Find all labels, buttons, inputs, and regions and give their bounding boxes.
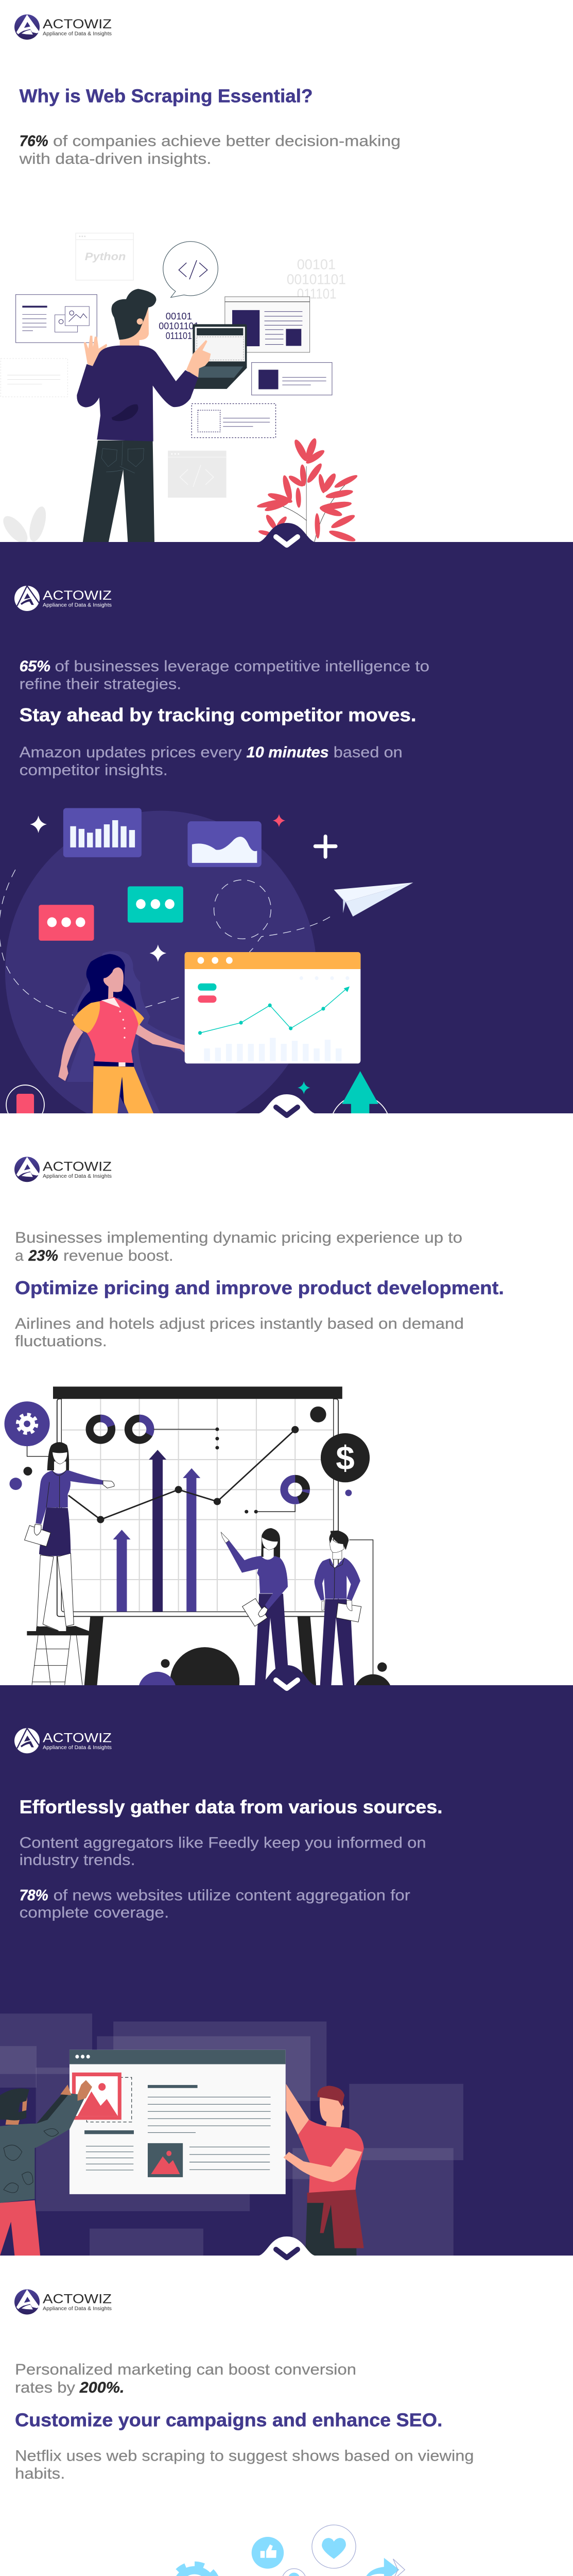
statistic text: 23% (28, 1247, 58, 1264)
illustration: people placing image on page (0, 2013, 463, 2256)
illustration: person with web cards (0, 233, 359, 547)
grey binary digits: 00101101 (287, 271, 346, 287)
icon: share arrow (364, 2558, 405, 2576)
supporting text: Content aggregators like Feedly keep you informed on (20, 1834, 426, 1851)
connector: section 3 (256, 1665, 318, 1688)
board legs (84, 1615, 316, 1687)
plant (256, 437, 359, 544)
woman pointing on ladder (25, 1442, 114, 1685)
supporting text (15, 2448, 474, 2482)
statistic text: 65% (20, 658, 50, 675)
grey binary digits: 00101 (297, 256, 336, 273)
bar chart card (63, 808, 142, 857)
logo: Appliance of Data & Insights (43, 31, 112, 37)
logo (14, 586, 112, 611)
connector: section 2 (256, 1094, 318, 1115)
man in red shirt (283, 2084, 364, 2256)
dollar coin (321, 1433, 370, 1482)
paper plane (334, 883, 413, 917)
statistic text: refine their strategies. (20, 676, 181, 692)
supporting text: 10 minutes (247, 744, 329, 761)
illustration: analytics dashboard (0, 808, 413, 1158)
logo: Appliance of Data & Insights (43, 1174, 112, 1179)
statistic text: a (15, 1247, 24, 1264)
illustration: SEO icons (138, 2525, 450, 2576)
dashed card (192, 404, 276, 438)
logo (14, 1157, 112, 1182)
panel: personalized marketing (0, 2256, 573, 2576)
panel: content aggregation (0, 1685, 573, 2256)
statistic text (15, 1229, 462, 1264)
badge bottom left (6, 1085, 44, 1124)
sparkles (30, 814, 336, 1094)
statistic text: of businesses leverage competitive intelligence to (55, 658, 429, 675)
grey binary digits (287, 256, 346, 301)
icon: thumbs up (252, 2537, 284, 2569)
statistic text: Businesses implementing dynamic pricing experience up to (15, 1229, 462, 1246)
panel: competitive intelligence (0, 542, 573, 1158)
icon: code speech bubble (163, 242, 218, 297)
statistic text: of companies achieve better decision-making (53, 133, 401, 149)
dashed flight path (0, 870, 333, 1015)
icon: python card: Python (85, 251, 126, 263)
logo: Appliance of Data & Insights (43, 1745, 112, 1751)
supporting text: Airlines and hotels adjust prices instantly based on demand (15, 1315, 464, 1332)
man with beard (0, 2080, 92, 2256)
laptop (179, 324, 247, 389)
small card (252, 363, 332, 395)
icon: heart (312, 2525, 356, 2568)
faded dashed card (1, 359, 67, 397)
panel: why web scraping is essential (0, 0, 573, 547)
connector: section 1 (256, 523, 318, 545)
growth arrows (113, 1450, 200, 1612)
connector: section 4 (256, 2236, 318, 2258)
big layout card (225, 297, 310, 352)
supporting text: industry trends. (20, 1852, 135, 1869)
donut charts (90, 1418, 306, 1500)
supporting text: habits. (15, 2465, 65, 2482)
line chart (68, 1426, 299, 1523)
chat bubble teal (128, 886, 183, 923)
logo: ACTOWIZ (43, 1731, 112, 1745)
colleague: woman (221, 1528, 289, 1686)
statistic text: revenue boost. (63, 1247, 173, 1264)
icon: location pin (282, 2569, 306, 2576)
supporting text: Amazon updates prices every (20, 744, 242, 761)
browser line chart window (185, 952, 360, 1063)
web page window (70, 2050, 286, 2194)
logo (14, 14, 112, 40)
logo: ACTOWIZ (43, 17, 112, 31)
board (53, 1386, 342, 1617)
supporting text (15, 1315, 464, 1350)
two colleagues (221, 1528, 361, 1686)
dark binary digits: 011101 (166, 331, 192, 342)
connectors and dots (9, 1406, 392, 1716)
statistic text: Personalized marketing can boost conversion (15, 2361, 356, 2378)
logo (14, 2290, 112, 2314)
illustration: presentation board (5, 1386, 392, 1716)
heading: Optimize pricing and improve product development. (15, 1277, 504, 1298)
logo: Appliance of Data & Insights (43, 2306, 112, 2312)
statistic text: complete coverage. (20, 1904, 169, 1921)
heading: Customize your campaigns and enhance SEO. (15, 2409, 443, 2430)
statistic text: 200%. (79, 2379, 125, 2396)
icon: gear (5, 1401, 51, 1456)
dark binary digits (159, 311, 199, 342)
statistic text: with data-driven insights. (19, 150, 212, 167)
logo (14, 1728, 112, 1753)
left image card (16, 295, 97, 343)
dark binary digits: 00101101 (159, 321, 199, 332)
statistic text: 76% (20, 133, 48, 149)
chat bubble pink (39, 905, 94, 941)
logo: Appliance of Data & Insights (43, 603, 112, 608)
dark binary digits: 00101 (166, 311, 192, 322)
supporting text: fluctuations. (15, 1333, 107, 1350)
logo: ACTOWIZ (43, 2292, 112, 2306)
statistic text: 78% (20, 1887, 48, 1904)
icon: large gear (170, 2564, 219, 2576)
supporting text: Netflix uses web scraping to suggest shows based on viewing (15, 2448, 474, 2465)
supporting text: competitor insights. (20, 762, 168, 779)
statistic text: of news websites utilize content aggregation for (54, 1887, 410, 1904)
dollar coin: $ (336, 1439, 355, 1477)
background panels (0, 2013, 463, 2256)
woman presenting (58, 951, 184, 1114)
logo: ACTOWIZ (43, 588, 112, 603)
logo: ACTOWIZ (43, 1159, 112, 1174)
heading: Effortlessly gather data from various sources. (20, 1797, 443, 1818)
icon: python card (76, 233, 133, 280)
section connector chevrons (256, 523, 318, 2576)
statistic text (19, 133, 401, 167)
statistic text (20, 658, 429, 692)
statistic text: rates by (15, 2379, 75, 2396)
supporting text (20, 1834, 426, 1869)
person from behind (77, 289, 211, 543)
grey leaves (0, 505, 49, 547)
supporting text (20, 744, 403, 779)
heading: Stay ahead by tracking competitor moves. (20, 704, 416, 725)
green up arrow (330, 1071, 390, 1158)
statistic text (15, 2361, 356, 2396)
statistic text (20, 1887, 410, 1921)
area chart card (187, 821, 262, 867)
panel: dynamic pricing (0, 1113, 573, 1716)
heading: Why is Web Scraping Essential? (20, 86, 313, 106)
supporting text: based on (334, 744, 403, 761)
grey binary digits: 011101 (297, 285, 336, 301)
colleague: man (315, 1531, 361, 1686)
grey code card (168, 451, 227, 498)
